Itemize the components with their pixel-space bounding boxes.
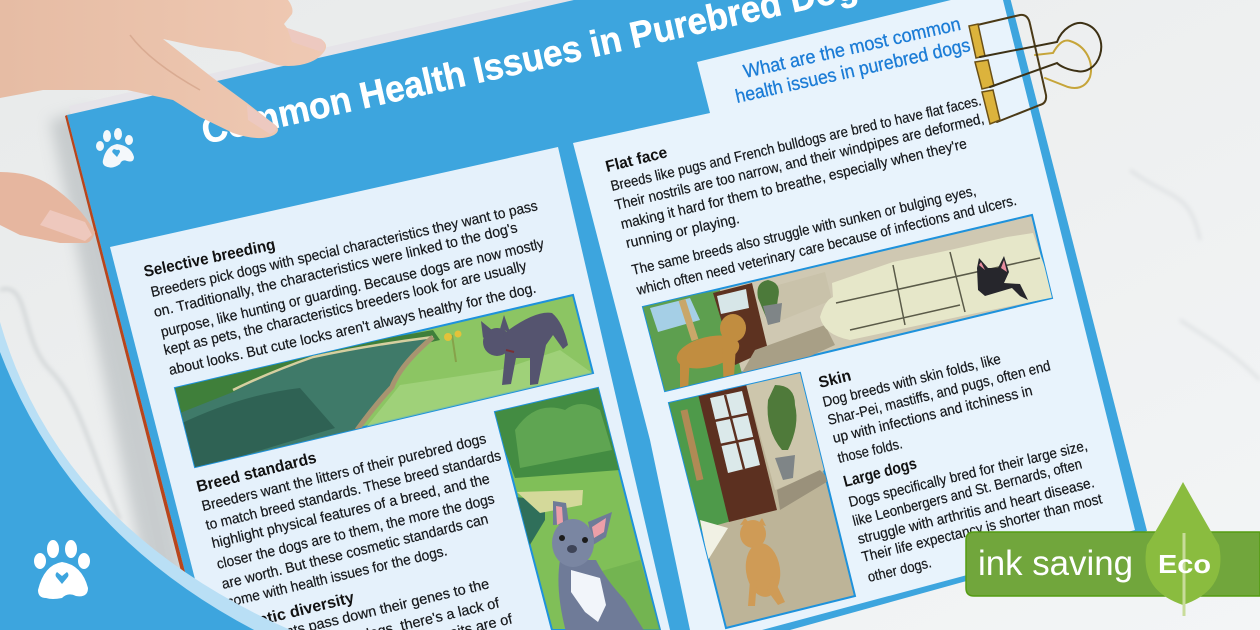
decorative corner swoosh <box>0 322 295 630</box>
badge: ink saving eco <box>966 482 1260 616</box>
icon: french bulldog <box>481 313 568 385</box>
text block: breed standards: to match breed standards. These breed standards <box>204 448 503 534</box>
text block: selective breeding: Breeders pick dogs with special characteristics they want to pass <box>149 198 539 301</box>
text block: skin: those folds. <box>836 436 904 467</box>
text block: large dogs: Dogs specifically bred for their large size, <box>847 438 1089 511</box>
text block: flat face: which often need veterinary care because of infections and ulcers. <box>634 193 1018 299</box>
text block: skin: Shar-Pei, mastiffs, and pugs, often end <box>826 358 1052 429</box>
paper stack edge <box>69 0 700 122</box>
icon: black dog <box>977 256 1028 300</box>
text block: breed standards: Breeders want the litters of their purebred dogs <box>200 431 488 515</box>
plant <box>757 280 779 322</box>
text block: large dogs: Their life expectancy is shorter than most <box>860 491 1104 566</box>
text block: selective breeding <box>142 198 546 379</box>
text block: skin <box>817 351 1052 467</box>
badge: ink saving eco: ink saving <box>978 544 1133 583</box>
icon: leaf <box>1146 482 1220 616</box>
icon: paw on page <box>96 128 134 168</box>
text block: flat face: running or playing. <box>624 211 741 252</box>
text block: skin: up with infections and itchiness in <box>831 383 1034 447</box>
text block: skin: Skin <box>817 367 853 392</box>
icon: grey bulldog <box>552 501 645 630</box>
illustration: dog by pond <box>170 295 595 470</box>
text block: selective breeding: on. Traditionally, the characteristics were linked to the dog's <box>152 220 519 321</box>
badge: ink saving eco: Eco <box>1158 549 1211 579</box>
text block: breed standards <box>195 431 503 611</box>
text block: selective breeding: Selective breeding <box>142 236 277 281</box>
text block: selective breeding: about looks. But cute locks aren't always healthy for the dog. <box>167 281 538 379</box>
illustration: living room with dogs <box>640 215 1055 395</box>
icon: large paw logo <box>34 540 90 599</box>
text block: skin: Dog breeds with skin folds, like <box>821 351 1003 411</box>
text block: large dogs: like Leonbergers and St. Bernards, often <box>851 456 1084 530</box>
text block: large dogs <box>842 438 1104 586</box>
text block: selective breeding: purpose, like hunting or guarding. Because dogs are now mostly <box>159 236 546 341</box>
heading: question callout: health issues in purebred dogs <box>734 35 972 108</box>
text block: selective breeding: kept as pets, the characteristics breeders look for are usually <box>162 258 529 359</box>
sofa <box>820 233 1055 340</box>
panel: right text panel <box>573 0 1135 630</box>
text block: flat face <box>604 93 1018 299</box>
text block: breed standards: come with health issues for the dogs. <box>225 543 449 611</box>
text block: breed standards: closer the dogs are to them, the more the dogs <box>215 491 496 573</box>
text block: large dogs: other dogs. <box>866 555 933 586</box>
text block: flat face: Their nostrils are too narrow, and their windpipes are deformed, <box>613 111 986 214</box>
hand: thumb <box>0 172 95 243</box>
heading: question callout: What are the most common <box>742 14 963 83</box>
icon: gold binder clip <box>969 15 1101 124</box>
text block: large dogs: Large dogs <box>842 455 919 491</box>
text block: large dogs: struggle with arthritis and heart disease. <box>856 475 1096 548</box>
text block: flat face: Breeds like pugs and French bulldogs are bred to have flat faces. <box>609 93 983 195</box>
text block: breed standards: are worth. But these cosmetic standards can <box>220 512 490 593</box>
icon: sitting tan dog <box>740 518 785 606</box>
text block: flat face: The same breeds also struggle with sunken or bulging eyes, <box>630 183 978 279</box>
icon: tan dog <box>673 314 746 392</box>
illustration: sitting grey bulldog <box>490 385 660 630</box>
panel: left text panel <box>110 147 670 630</box>
illustration: dog at door <box>668 373 855 628</box>
hand: upper fingers <box>0 0 326 138</box>
text block: flat face: making it hard for them to breathe, especially when they're <box>619 136 969 233</box>
text block: breed standards: Breed standards <box>195 450 318 496</box>
text block: breed standards: highlight physical features of a breed, and the <box>210 471 491 552</box>
text block: flat face: Flat face <box>604 144 669 176</box>
